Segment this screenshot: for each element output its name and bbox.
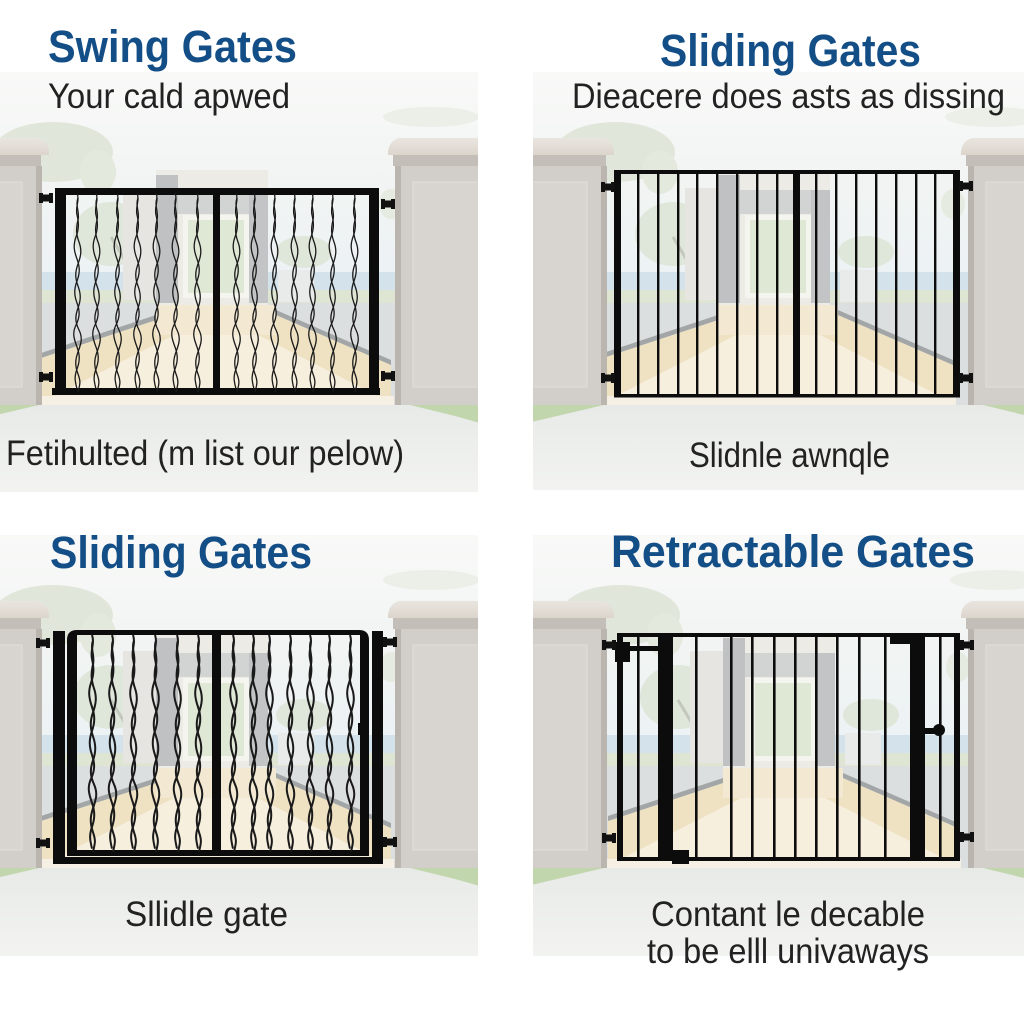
subtitle: Dieacere does asts as dissing (572, 77, 1005, 116)
panel: sliding gates top (533, 33, 1024, 490)
panel: swing gates (0, 21, 516, 495)
gate: twisted bars double swing (39, 188, 395, 395)
gate: twisted bars sliding (36, 630, 397, 864)
gate: retractable with heavy posts (602, 633, 974, 864)
scene background (533, 560, 1024, 956)
caption line two: to be elll univaways (647, 932, 929, 971)
subtitle: Your cald apwed (48, 77, 290, 116)
gate: straight bars (601, 170, 973, 398)
panel: sliding gates bottom (0, 527, 516, 958)
panel: retractable gates (533, 534, 1024, 970)
title: Swing Gates (48, 21, 297, 72)
caption: Fetihulted (m list our pelow) (6, 434, 404, 473)
title: Retractable Gates (611, 526, 975, 577)
scene background (0, 560, 478, 956)
caption line one: Contant le decable (651, 895, 925, 934)
title: Sliding Gates (50, 527, 312, 578)
scene background (0, 96, 478, 492)
title: Sliding Gates (660, 25, 921, 76)
caption: Slidnle awnqle (689, 436, 890, 475)
caption: Sllidle gate (125, 895, 288, 934)
scene background (533, 96, 1024, 490)
